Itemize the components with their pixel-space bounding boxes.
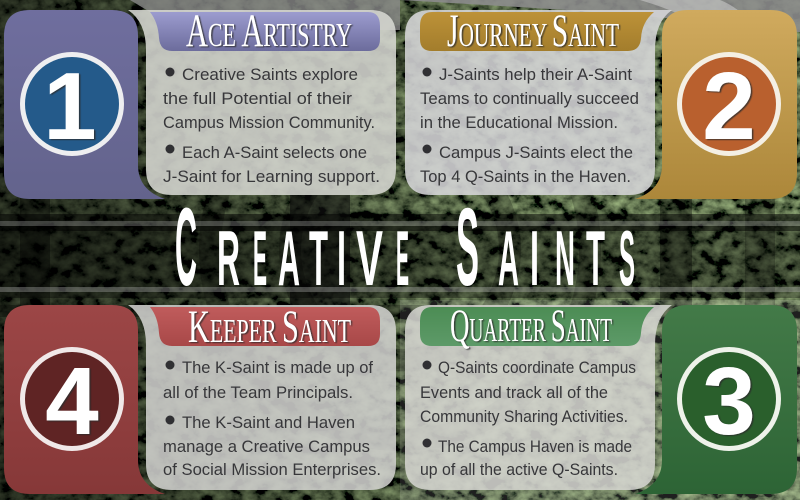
panel 2: Journey Saint xyxy=(405,5,797,199)
title: I xyxy=(337,214,346,302)
title: A xyxy=(278,214,300,302)
bullet text 1: Each A-Saint selects one xyxy=(182,143,367,162)
bullet text 4: of Social Mission Enterprises. xyxy=(163,460,381,479)
color card 2 xyxy=(635,10,797,199)
title: N xyxy=(555,214,575,302)
bullet text 4: manage a Creative Campus xyxy=(163,437,370,456)
title: T xyxy=(309,214,328,302)
bullet text 3: The Campus Haven is made xyxy=(438,437,632,456)
bullet text 2: Teams to continually succeed xyxy=(420,89,639,108)
header tab 3 xyxy=(420,307,654,346)
title: S xyxy=(456,186,479,309)
title: I xyxy=(530,214,539,302)
bullet text 4 xyxy=(163,358,381,479)
bullet text 1: J-Saint for Learning support. xyxy=(163,167,380,186)
title: A xyxy=(498,214,519,302)
number badge 4 xyxy=(20,347,124,455)
color card 3 xyxy=(635,305,797,494)
title: V xyxy=(356,214,383,302)
panel 1: Ace Artistry xyxy=(4,5,396,199)
title xyxy=(175,186,635,309)
bullet text 4: all of the Team Principals. xyxy=(163,383,353,402)
text card 3 xyxy=(405,305,672,490)
bullet text 3: Events and track all of the xyxy=(420,383,608,402)
bullet text 4: The K-Saint is made up of xyxy=(182,358,373,377)
bullet text 3: up of all the active Q-Saints. xyxy=(420,460,618,479)
bullet text 3 xyxy=(420,358,636,479)
number badge 3: 3 xyxy=(702,348,756,455)
heading 4: KEEPER SAINT xyxy=(188,301,351,353)
bullet text 2: in the Educational Mission. xyxy=(420,113,618,132)
bullet text 2 xyxy=(420,65,639,186)
bullet text 2: J-Saints help their A-Saint xyxy=(439,65,632,84)
number badge 2: 2 xyxy=(702,53,756,160)
panel 4: Keeper Saint xyxy=(4,301,396,494)
heading 3: QUARTER SAINT xyxy=(450,300,612,352)
header tab 2 xyxy=(420,12,654,51)
bullet text 2: Campus J-Saints elect the xyxy=(439,143,633,162)
number badge 4: 4 xyxy=(45,348,99,455)
number badge 3 xyxy=(677,347,781,455)
bullet text 1 xyxy=(163,65,380,186)
number badge 2 xyxy=(677,52,781,160)
title: E xyxy=(396,214,409,302)
bullet text 4: The K-Saint and Haven xyxy=(182,413,355,432)
bullet text 1: Campus Mission Community. xyxy=(163,113,375,132)
title: C xyxy=(175,186,197,309)
bullet text 2: Top 4 Q-Saints in the Haven. xyxy=(420,167,631,186)
text card 1 xyxy=(128,10,396,195)
title: T xyxy=(586,214,605,302)
panel 3: Quarter Saint xyxy=(405,300,797,494)
title: R xyxy=(217,214,240,302)
text card 2 xyxy=(405,10,672,195)
text: S xyxy=(619,214,635,302)
bullet text 3: Community Sharing Activities. xyxy=(420,407,628,426)
header tab 4 xyxy=(150,307,380,346)
color card 1 xyxy=(4,10,165,199)
number badge 1 xyxy=(20,52,124,160)
bullet text 1: the full Potential of their xyxy=(163,89,352,108)
bullet text 3: Q-Saints coordinate Campus xyxy=(438,358,636,377)
heading 2: JOURNEY SAINT xyxy=(447,5,619,57)
header tab 1 xyxy=(150,12,380,51)
color card 4 xyxy=(4,305,165,494)
bullet text 1: Creative Saints explore xyxy=(182,65,358,84)
number badge 1: 1 xyxy=(43,53,97,160)
title: E xyxy=(253,214,267,302)
heading 1: ACE ARTISTRY xyxy=(186,5,352,57)
text card 4 xyxy=(128,305,396,490)
